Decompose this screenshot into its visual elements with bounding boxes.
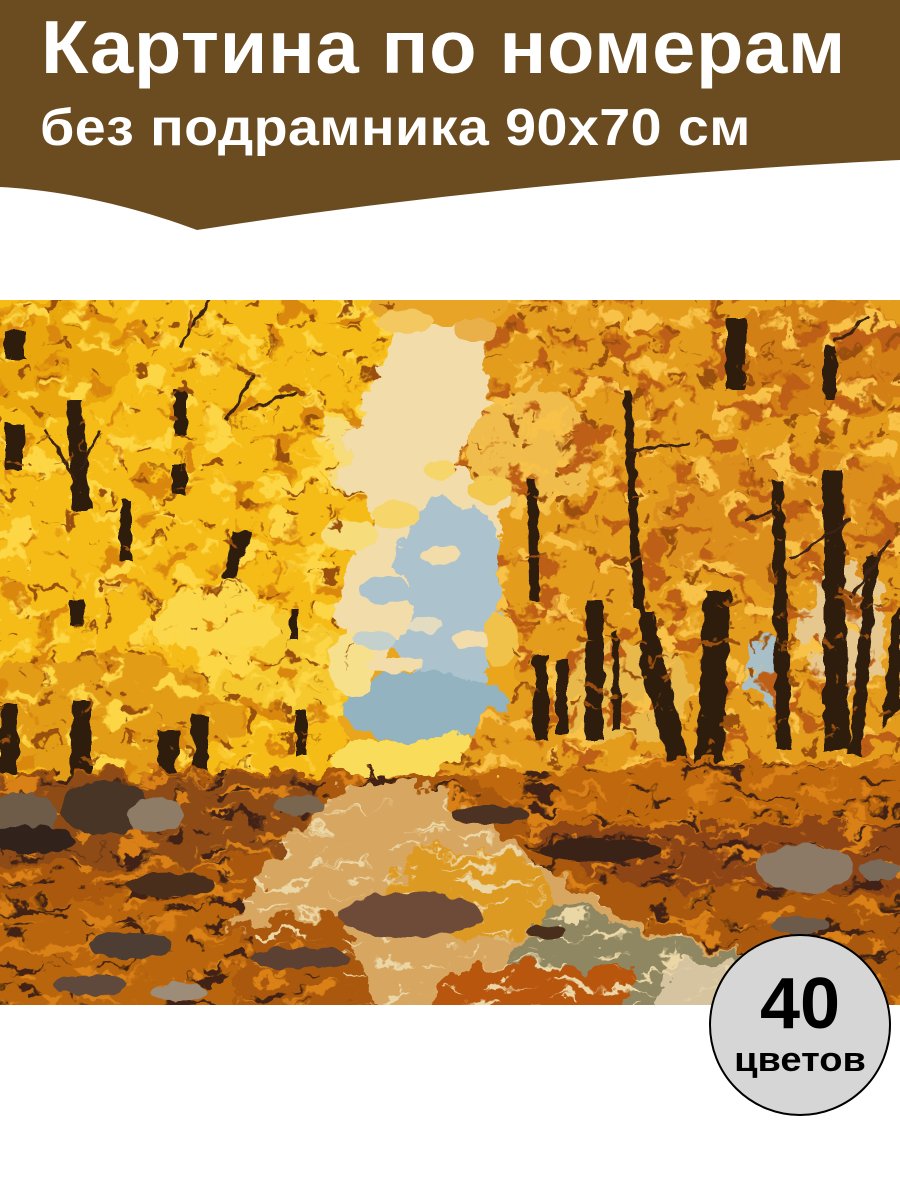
title: Картина по номерам [41, 5, 846, 89]
rocks [0, 782, 900, 1001]
badge: 40 colours [709, 934, 891, 1116]
autumn forest painting [0, 300, 900, 1005]
subtitle: без подрамника 90х70 см [40, 99, 751, 157]
forest floor [0, 754, 900, 1005]
badge number: 40 [760, 964, 840, 1044]
foliage overlay leaves [0, 300, 900, 778]
sky and background [0, 300, 900, 1005]
header banner [0, 0, 900, 230]
left foliage dabs [0, 300, 393, 782]
badge label: цветов [734, 1041, 866, 1079]
foliage fringe over sky [322, 286, 518, 697]
left yellow foliage [0, 300, 394, 784]
tree trunks [0, 300, 900, 780]
stream [224, 778, 742, 1005]
right orange foliage [434, 300, 900, 776]
right foliage dabs [435, 300, 900, 778]
